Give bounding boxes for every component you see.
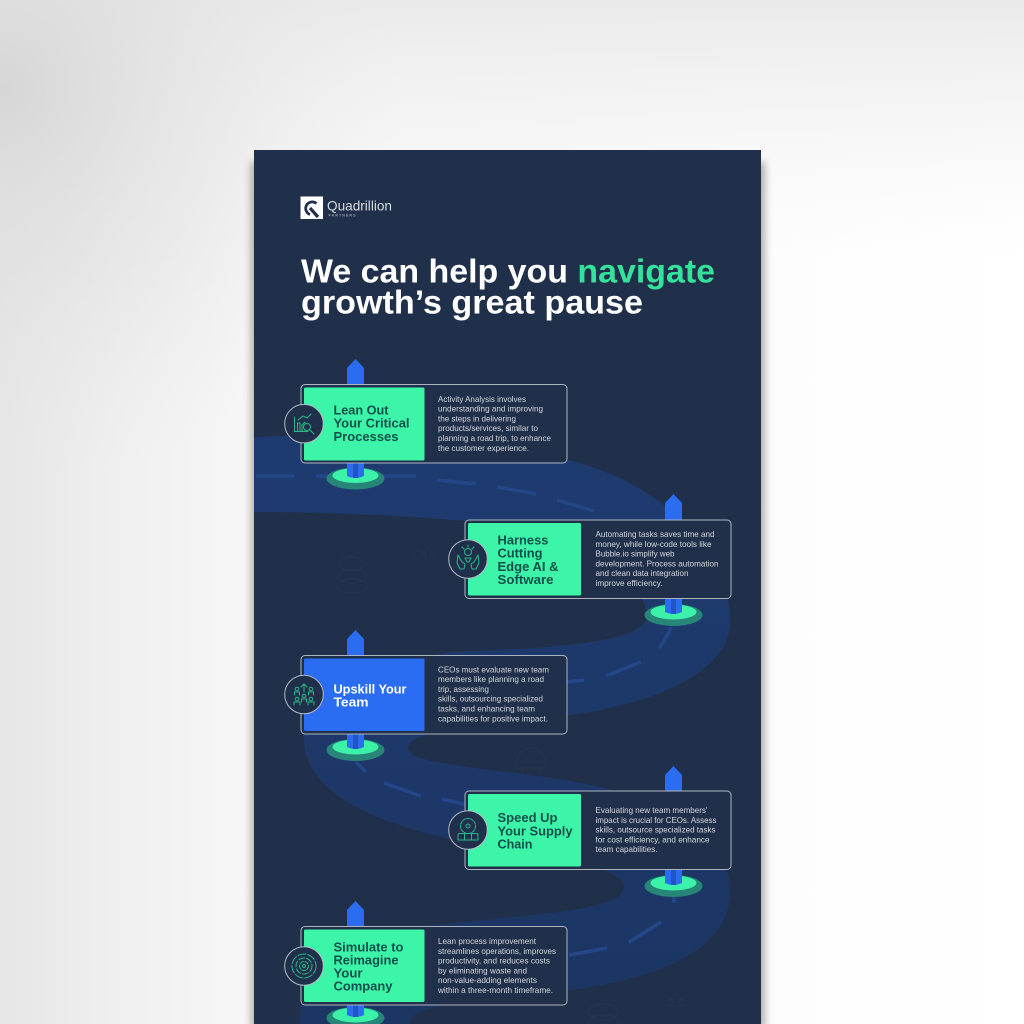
description: Automating tasks saves time and (596, 529, 715, 539)
description (596, 529, 719, 588)
heading: Simulate to (334, 939, 404, 954)
description: trip, assessing (438, 684, 489, 694)
description: productivity, and reduces costs (438, 956, 550, 966)
description: team capabilities. (596, 844, 658, 854)
signpost 2 (644, 494, 702, 626)
heading: Your (334, 966, 362, 981)
icon: concentric cycle (285, 947, 323, 985)
description: within a three-month timeframe. (437, 985, 553, 995)
description: Activity Analysis involves (438, 394, 526, 404)
description: by eliminating waste and (438, 965, 527, 975)
road dashes (256, 476, 674, 955)
heading: Chain (498, 837, 533, 852)
description: the steps in delivering (438, 413, 516, 423)
heading: Company (334, 979, 393, 994)
signpost 5 (326, 901, 384, 1024)
description: capabilities for positive impact. (438, 713, 548, 723)
description (438, 394, 551, 453)
heading: Cutting (498, 546, 543, 561)
winding road (254, 435, 730, 1024)
logo subtitle: PARTNERS (328, 214, 356, 218)
description: the customer experience. (438, 443, 529, 453)
description: members like planning a road (438, 674, 544, 684)
card 1: lean out (285, 384, 567, 463)
description: money, while low-code tools like (596, 539, 712, 549)
faint background icons (337, 548, 683, 1024)
icon: gear with people (449, 811, 487, 849)
logo wordmark: Quadrillion (327, 198, 392, 214)
description (596, 805, 716, 854)
heading (498, 533, 558, 587)
signpost 3 (326, 630, 384, 761)
description: streamlines operations, improves (438, 946, 556, 956)
heading (334, 402, 410, 444)
description: Bubble.io simplify web (596, 549, 675, 559)
description (437, 936, 556, 995)
heading (498, 810, 573, 852)
card 4: supply chain (449, 791, 731, 870)
description: planning a road trip, to enhance (438, 433, 551, 443)
logo mark (300, 196, 323, 219)
heading: Edge AI & (498, 559, 558, 574)
heading: Software (498, 572, 554, 587)
card 3: upskill (285, 656, 567, 734)
description: impact is crucial for CEOs. Assess (596, 815, 716, 825)
heading: Your Critical (334, 416, 410, 431)
description: for cost efficiency, and enhance (596, 834, 710, 844)
card 2: harness AI (449, 520, 731, 598)
description: skills, outsource specialized tasks (596, 825, 716, 835)
signpost 4 (644, 766, 702, 897)
title: We can help you navigate (301, 252, 715, 290)
logo (300, 196, 392, 219)
heading (334, 682, 406, 710)
description: CEOs must evaluate new team (438, 664, 549, 674)
heading: Your Supply (498, 823, 573, 838)
title (301, 252, 715, 320)
description (438, 664, 549, 723)
description: and clean data integration (596, 568, 689, 578)
heading: Processes (334, 429, 398, 444)
icon: hands with bulb (449, 540, 487, 578)
heading: Reimagine (334, 952, 398, 967)
heading: Team (334, 695, 368, 710)
description: Lean process improvement (438, 936, 537, 946)
title: growth’s great pause (301, 284, 643, 320)
icon: chart with magnifier (285, 404, 323, 443)
description: products/services, similar to (438, 423, 538, 433)
description: improve efficiency. (596, 578, 662, 588)
card 5: simulate (285, 926, 567, 1005)
heading: Upskill Your (334, 682, 406, 697)
heading (334, 939, 404, 994)
heading: Lean Out (334, 402, 389, 417)
signpost 1 (326, 359, 384, 490)
panel shadow (251, 162, 765, 1024)
icon: team with up arrow (285, 675, 323, 714)
description: non-value-adding elements (438, 975, 537, 985)
heading: Speed Up (498, 810, 558, 825)
heading: Harness (498, 533, 548, 548)
description: skills, outsourcing specialized (438, 694, 543, 704)
description: development. Process automation (596, 558, 719, 568)
poster panel (254, 150, 761, 1024)
description: Evaluating new team members' (596, 805, 708, 815)
description: tasks, and enhancing team (438, 704, 535, 714)
description: understanding and improving (438, 404, 543, 414)
